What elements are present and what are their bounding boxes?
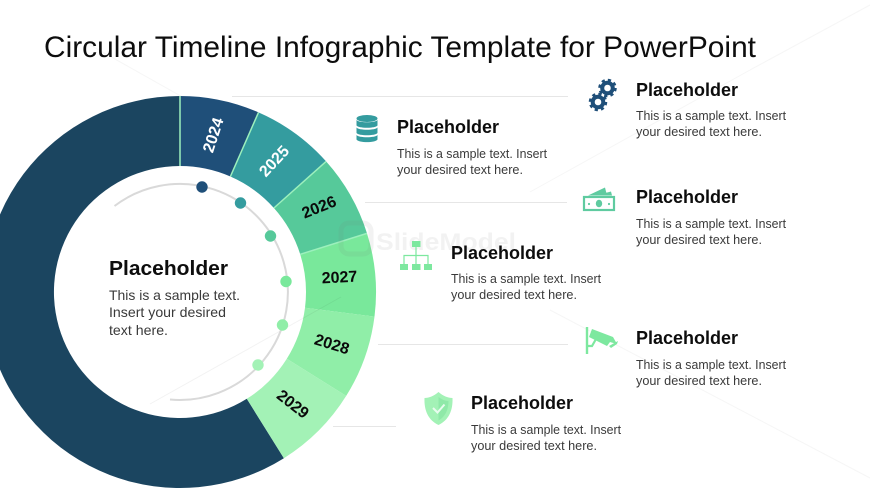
icon: shield	[424, 392, 453, 425]
text block: item 3	[636, 187, 787, 247]
text block: item 1: This is a sample text. Insert	[397, 147, 548, 161]
text block: item 4: Placeholder	[451, 243, 553, 263]
text block: item 3: Placeholder	[636, 187, 738, 207]
watermark: SlideModel	[376, 229, 516, 256]
text block: item 4: This is a sample text. Insert	[451, 272, 602, 286]
label: 2026: 2026	[300, 193, 339, 222]
icon: gears	[590, 80, 616, 110]
segment: remaining ring	[0, 96, 284, 488]
segment: 2026	[274, 161, 367, 254]
text block: item 2: your desired text here.	[636, 125, 762, 139]
text block: item 1: your desired text here.	[397, 163, 523, 177]
circular timeline donut	[0, 96, 376, 488]
label: 2024: 2024	[200, 116, 228, 155]
text block: item 2: This is a sample text. Insert	[636, 109, 787, 123]
label: 2029: 2029	[273, 387, 312, 423]
inner progress arc with dots	[114, 181, 292, 400]
center text block: Insert your desired	[109, 304, 226, 320]
text block: item 6: This is a sample text. Insert	[471, 423, 622, 437]
text block: item 3: This is a sample text. Insert	[636, 217, 787, 231]
segment: 2028	[287, 308, 374, 396]
center text block: This is a sample text.	[109, 287, 240, 303]
text block: item 5	[636, 328, 787, 388]
icon: money	[584, 188, 614, 210]
label: 2025: 2025	[256, 143, 293, 180]
text block: item 4	[451, 243, 602, 302]
text block: item 1: Placeholder	[397, 117, 499, 137]
center text block: Placeholder	[109, 257, 228, 280]
text block: item 6: Placeholder	[471, 393, 573, 413]
text block: item 5: This is a sample text. Insert	[636, 358, 787, 372]
text block: item 5: your desired text here.	[636, 374, 762, 388]
icon: database	[356, 115, 378, 142]
segment: 2024	[180, 96, 258, 176]
watermark	[341, 223, 516, 256]
label: 2027: 2027	[321, 269, 358, 287]
center text block: text here.	[109, 322, 168, 338]
text block: item 5: Placeholder	[636, 328, 738, 348]
icon: security camera	[587, 327, 618, 354]
text block: item 2	[636, 80, 787, 139]
text block: item 2: Placeholder	[636, 80, 738, 100]
title: Circular Timeline Infographic Template for PowerPoint	[44, 31, 757, 64]
segment: 2029	[247, 359, 346, 458]
label: 2028: 2028	[312, 332, 351, 358]
text block: item 3: your desired text here.	[636, 233, 762, 247]
text block: item 4: your desired text here.	[451, 288, 577, 302]
icon: org chart	[400, 241, 432, 270]
text block: item 6: your desired text here.	[471, 439, 597, 453]
text block: item 1	[397, 117, 548, 177]
segment: 2027	[300, 233, 376, 317]
segment: 2025	[230, 112, 326, 208]
center text block	[109, 257, 240, 338]
text block: item 6	[471, 393, 622, 453]
